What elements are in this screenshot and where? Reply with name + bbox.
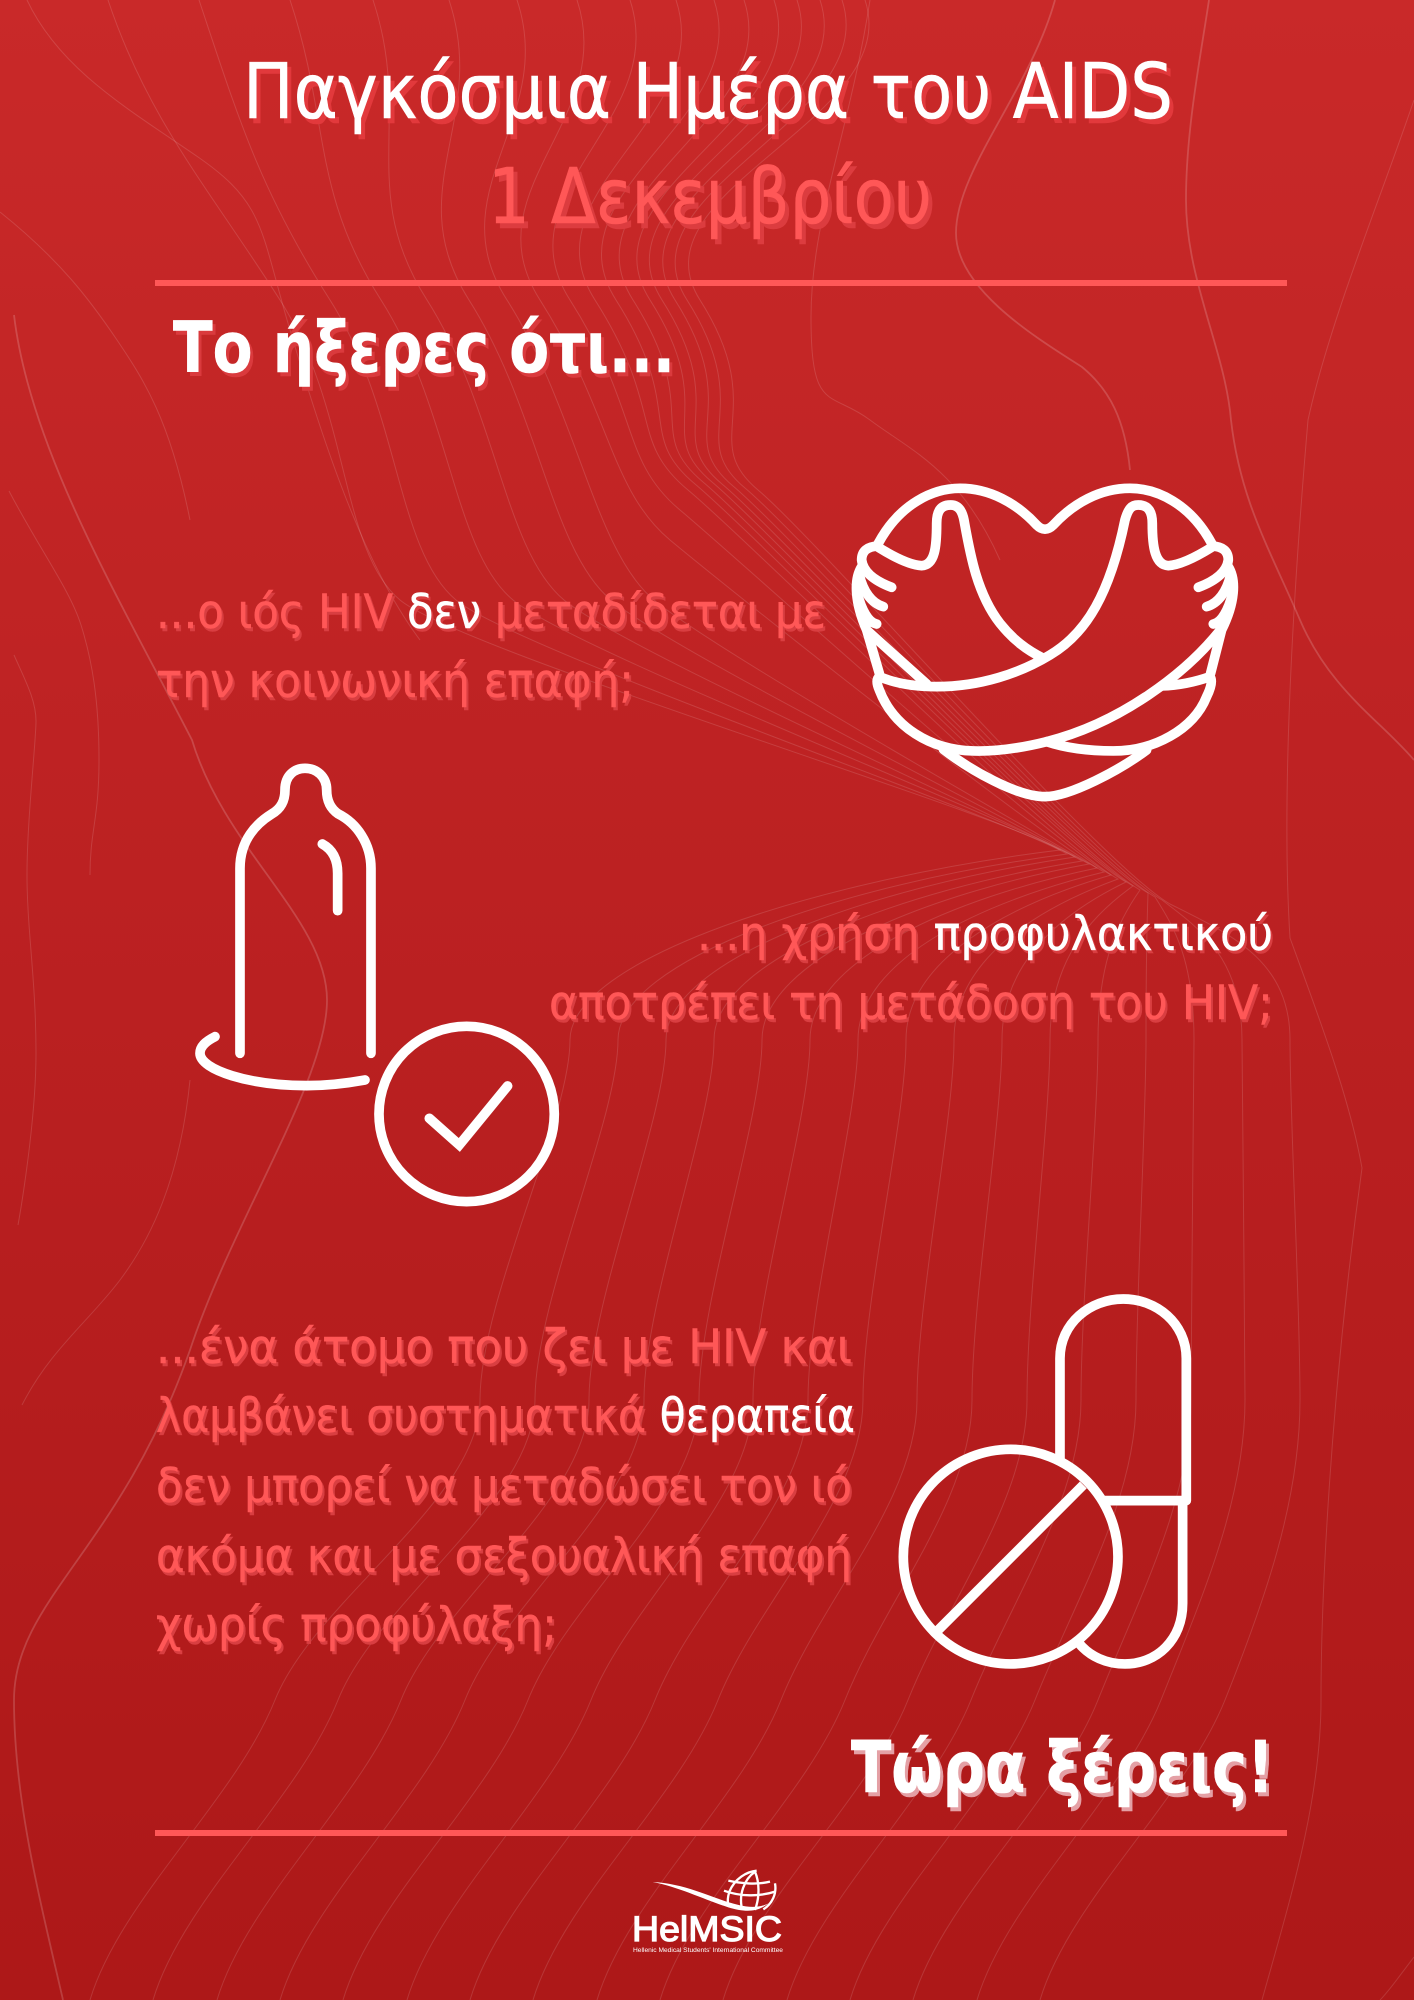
- text block: treatment: ...ένα άτομο που ζει με HIV και: [156, 1320, 852, 1375]
- icon: pills: [903, 1299, 1186, 1664]
- text block: treatment: ακόμα και με σεξουαλική επαφή: [156, 1529, 852, 1584]
- subtitle: date: 1 Δεκεμβρίου: [488, 153, 932, 242]
- text block: treatment: λαμβάνει συστηματικά θεραπεία: [156, 1389, 855, 1444]
- text block: treatment: χωρίς προφύλαξη;: [156, 1598, 557, 1653]
- title: Παγκόσμια Ημέρα του AIDS: [243, 48, 1173, 137]
- icon: heart hugged by arms: [856, 488, 1233, 797]
- text block: social contact: [156, 585, 826, 709]
- text block: treatment: δεν μπορεί να μεταδώσει τον ιό: [156, 1459, 852, 1514]
- top divider: [155, 280, 1287, 286]
- text block: condom use: αποτρέπει τη μετάδοση του HIV;: [549, 976, 1273, 1031]
- text block: treatment: [156, 1320, 855, 1653]
- logo: HelMSIC: [632, 1871, 783, 1954]
- text block: social contact: ...ο ιός HIV δεν μεταδίδεται με: [156, 585, 826, 640]
- text block: social contact: την κοινωνική επαφή;: [156, 654, 634, 709]
- logo emblem: globe and swoosh: [653, 1871, 775, 1911]
- bottom divider: [155, 1830, 1287, 1836]
- logo wordmark: HelMSIC: [632, 1910, 782, 1949]
- text block: condom use: [549, 907, 1273, 1031]
- text block: condom use: ...η χρήση προφυλακτικού: [697, 907, 1273, 962]
- heading: did you know: Το ήξερες ότι...: [173, 307, 675, 389]
- closing statement: Τώρα ξέρεις!: [851, 1726, 1274, 1809]
- logo tagline: Hellenic Medical Students' International Committee: [633, 1947, 783, 1954]
- icon: condom with check mark: [200, 768, 554, 1202]
